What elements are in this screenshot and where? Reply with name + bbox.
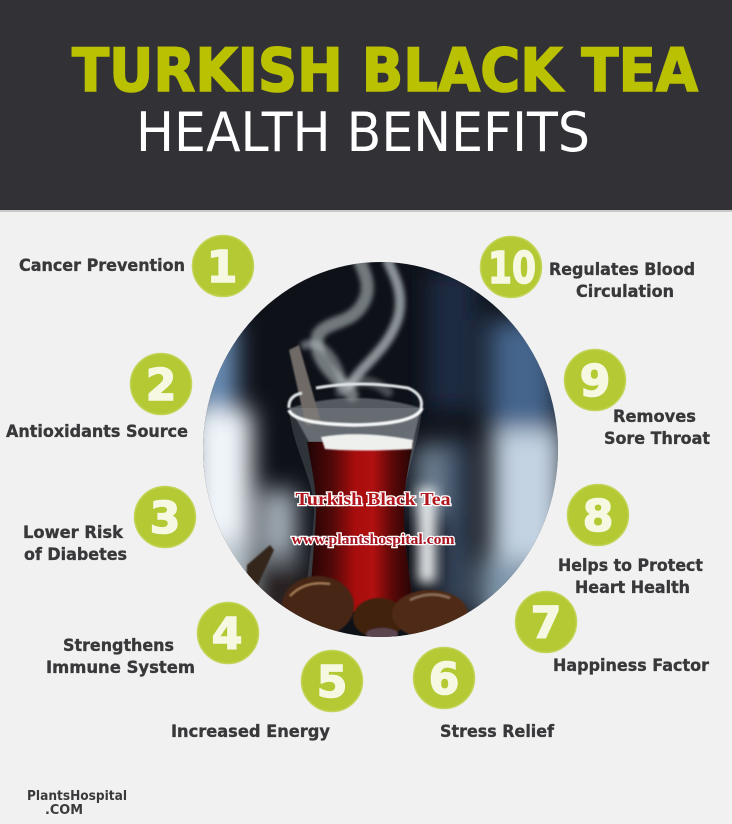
- glass interior: [290, 398, 421, 442]
- subtitle: HEALTH BENEFITS: [136, 101, 590, 164]
- glass body: [289, 408, 422, 612]
- benefit 6: Stress Relief: [440, 722, 555, 742]
- glass rim: [289, 384, 422, 425]
- benefit 1: 1: [207, 242, 237, 293]
- benefit 9: Sore Throat: [604, 429, 710, 449]
- benefit 8: Heart Health: [575, 578, 690, 598]
- benefit 6: [414, 648, 555, 742]
- benefit 9: 9: [580, 356, 610, 407]
- header band: [0, 0, 732, 212]
- footer brand: PlantsHospital: [27, 789, 127, 804]
- benefit 4: Immune System: [46, 658, 195, 678]
- footer brand: [27, 789, 127, 818]
- central tea photo: [190, 258, 562, 642]
- benefit 8: 8: [583, 491, 613, 542]
- benefit 2: [6, 354, 192, 442]
- tea liquid: [307, 442, 414, 612]
- benefit 9: Removes: [613, 407, 696, 427]
- benefit 5: 5: [317, 657, 347, 708]
- benefit 2: Antioxidants Source: [6, 422, 188, 442]
- benefit 1: Cancer Prevention: [19, 256, 185, 276]
- steam: [305, 262, 400, 395]
- benefit 3: Lower Risk: [23, 523, 124, 543]
- benefit 4: [46, 602, 258, 678]
- benefit 8: [558, 484, 703, 598]
- benefit 4: 4: [212, 609, 242, 660]
- benefit 4: Strengthens: [63, 636, 174, 656]
- benefit 10: [480, 236, 695, 302]
- benefit 1: [19, 236, 254, 296]
- footer brand: .COM: [45, 803, 83, 818]
- benefit 2: 2: [146, 360, 176, 411]
- benefit 5: [171, 650, 362, 742]
- benefit 7: Happiness Factor: [553, 656, 710, 676]
- benefit 3: of Diabetes: [24, 545, 127, 565]
- benefit 5: Increased Energy: [171, 722, 330, 742]
- photo caption: Turkish Black Tea: Turkish Black Tea: [296, 489, 450, 509]
- benefit 3: [23, 486, 196, 565]
- benefit 3: 3: [150, 493, 180, 544]
- sugar lumps: [246, 545, 468, 640]
- benefit 10: Regulates Blood: [549, 260, 695, 280]
- highlight beside glass: [418, 488, 436, 583]
- benefit 9: [564, 350, 710, 449]
- photo caption: website: www.plantshospital.com: [292, 532, 454, 548]
- benefit 7: 7: [531, 598, 561, 649]
- spoon: [289, 345, 321, 426]
- benefit 10: 10: [488, 243, 536, 294]
- benefit 6: 6: [429, 654, 459, 705]
- benefit 8: Helps to Protect: [558, 556, 703, 576]
- benefit 10: Circulation: [576, 282, 674, 302]
- benefit 7: [516, 592, 710, 676]
